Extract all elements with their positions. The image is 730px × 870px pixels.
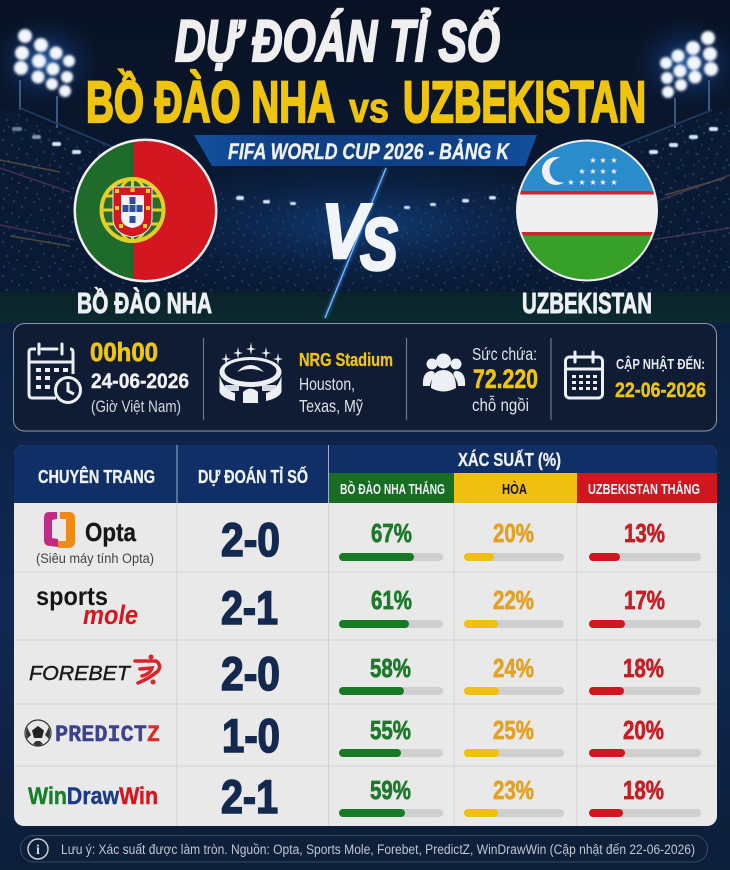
percentages: 67% (371, 518, 412, 548)
table headers: CHUYÊN TRANG (38, 466, 155, 487)
title: DỰ ĐOÁN TỈ SỐ (175, 9, 500, 74)
percentages: 58% (370, 653, 411, 683)
table headers: DỰ ĐOÁN TỈ SỐ (198, 466, 308, 487)
icon: info (28, 839, 48, 859)
logo: Forebet (29, 654, 160, 685)
percentages: 55% (370, 715, 411, 745)
stand lights (12, 127, 718, 209)
title (86, 9, 646, 135)
panel: match info (14, 324, 716, 431)
percentages: 22% (493, 585, 534, 615)
logo: Opta: (Siêu máy tính Opta) (36, 551, 154, 566)
flag: Uzbekistan: ★ (589, 156, 597, 165)
probability bars (339, 553, 701, 817)
competition ribbon: FIFA WORLD CUP 2026 - BẢNG K (228, 139, 510, 164)
scores: 2-0 (221, 647, 280, 700)
percentages: 23% (493, 775, 534, 805)
table: predictions (14, 445, 717, 826)
flag: Uzbekistan: ★ (589, 178, 597, 187)
VS emblem (321, 168, 398, 318)
scores: 1-0 (222, 709, 280, 762)
venue: NRG Stadium (299, 350, 393, 370)
flag: Uzbekistan: ★ (610, 167, 618, 176)
table headers (38, 449, 700, 498)
flag: Uzbekistan: ★ (589, 167, 597, 176)
flag: Uzbekistan (515, 135, 660, 286)
table headers: XÁC SUẤT (%) (458, 449, 561, 470)
flag: Uzbekistan: ★ (578, 167, 586, 176)
capacity: 72.220 (473, 364, 538, 394)
flag: Uzbekistan: ★ (610, 178, 618, 187)
footnote (20, 836, 708, 862)
flag: Uzbekistan: ★ (610, 156, 618, 165)
flag: Uzbekistan: ★ (578, 178, 586, 187)
percentages: 61% (371, 585, 412, 615)
icon: info: i (36, 843, 40, 858)
update date (615, 355, 706, 402)
flag: Portugal (74, 138, 218, 282)
table headers: HÒA (502, 480, 527, 498)
title: BỒ ĐÀO NHA (86, 70, 335, 135)
icon: stadium (220, 342, 283, 403)
scores: 2-1 (221, 770, 278, 823)
team names: BỒ ĐÀO NHA (77, 286, 212, 320)
flag: Uzbekistan: ★ (599, 167, 607, 176)
table background (14, 445, 717, 826)
flag: Uzbekistan: ★ (599, 178, 607, 187)
venue: Texas, Mỹ (299, 396, 363, 416)
floodlight right (610, 16, 730, 150)
logo: Sports Mole: sports (36, 581, 108, 611)
icon: calendar with clock (29, 344, 80, 402)
percentages: 18% (623, 653, 664, 683)
percentages: 18% (623, 775, 664, 805)
table headers: BỒ ĐÀO NHA THẮNG (340, 480, 445, 498)
scores: 2-1 (221, 581, 278, 634)
logo: Opta: Opta (85, 517, 136, 547)
scores: 2-0 (221, 513, 280, 566)
flag: Uzbekistan: ★ (599, 156, 607, 165)
competition ribbon (194, 135, 537, 166)
capacity (472, 344, 538, 415)
logo: Opta (36, 512, 154, 566)
logo: PredictZ: PREDICTZ (55, 722, 160, 748)
team names (77, 286, 652, 320)
scores (221, 513, 280, 823)
logo: Forebet: FOREBET (29, 663, 132, 685)
percentages: 20% (493, 518, 534, 548)
capacity: Sức chứa: (472, 344, 537, 364)
percentages: 20% (623, 715, 664, 745)
capacity: chỗ ngồi (472, 394, 529, 415)
kickoff time: 24-06-2026 (91, 370, 189, 393)
percentages (370, 518, 665, 805)
team names: UZBEKISTAN (522, 288, 652, 320)
percentages: 59% (370, 775, 411, 805)
kickoff time (90, 337, 189, 416)
title: vs (349, 84, 389, 131)
icon: people (423, 354, 465, 392)
logo: Sports Mole: mole (83, 600, 138, 630)
update date: 22-06-2026 (615, 379, 706, 402)
logo: WinDrawWin: WinDrawWin (28, 783, 158, 810)
logo: Sports Mole (36, 581, 138, 630)
VS emblem: V (321, 187, 372, 275)
floodlight left (0, 14, 120, 150)
VS emblem: S (360, 203, 398, 286)
percentages: 25% (493, 715, 534, 745)
venue (299, 350, 393, 416)
kickoff time: 00h00 (90, 337, 158, 367)
venue: Houston, (299, 374, 355, 394)
percentages: 17% (624, 585, 665, 615)
percentages: 24% (493, 653, 534, 683)
flag: Uzbekistan: ★ (567, 178, 575, 187)
icon: calendar (566, 352, 602, 398)
kickoff time: (Giờ Việt Nam) (91, 397, 181, 416)
percentages: 13% (624, 518, 665, 548)
